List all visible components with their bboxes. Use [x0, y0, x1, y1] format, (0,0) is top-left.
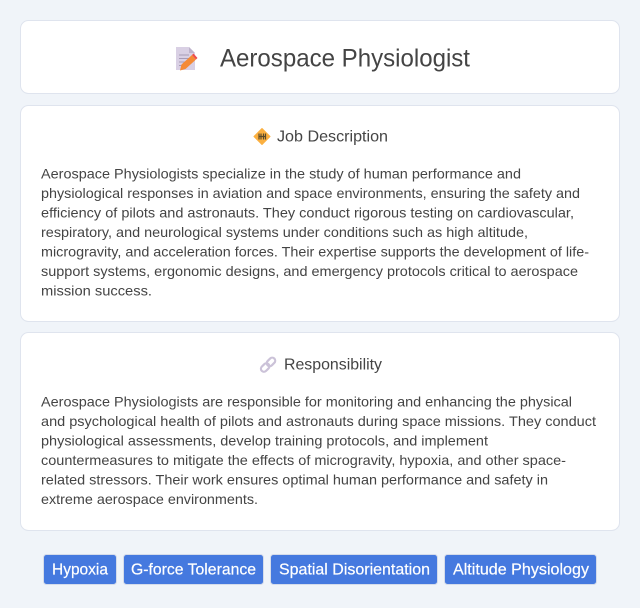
- text: responsibility paragraph: and psychological health of pilots and astronauts during space missions. They conduct: [41, 413, 596, 429]
- title: Aerospace Physiologist: [220, 44, 470, 72]
- text: job description paragraph: respiratory, and neurological systems under conditions such as high altitude,: [41, 224, 528, 240]
- panel: title card: [20, 20, 620, 94]
- text: job description paragraph: mission success.: [41, 282, 152, 298]
- tag: hypoxia: [44, 554, 116, 584]
- text: responsibility paragraph: [41, 394, 596, 507]
- text: responsibility paragraph: Aerospace Physiologists are responsible for monitoring and enhancing the physical: [41, 394, 572, 410]
- icon: chain link: [260, 356, 276, 373]
- icon: orange diamond sign: [254, 128, 270, 144]
- text: job description paragraph: support systems, ergonomic designs, and emergency protocols critical to aerospace: [41, 263, 578, 279]
- tag: g-force tolerance: G-force Tolerance: [131, 562, 256, 578]
- text: responsibility paragraph: extreme aerospace environments.: [41, 491, 258, 507]
- text: job description paragraph: physiological responses in aviation and space environments, ensuring the safety and: [41, 185, 580, 201]
- tag: spatial disorientation: [270, 554, 438, 584]
- tag: altitude physiology: [444, 554, 596, 584]
- heading: job description: Job Description: [277, 128, 388, 146]
- text: job description paragraph: Aerospace Physiologists specialize in the study of human performance and: [41, 166, 521, 182]
- tag: altitude physiology: Altitude Physiology: [453, 562, 589, 578]
- tag: spatial disorientation: Spatial Disorientation: [279, 562, 430, 578]
- heading: responsibility: Responsibility: [284, 356, 382, 374]
- panel: responsibility: [20, 332, 620, 530]
- text: job description paragraph: microgravity, and acceleration forces. Their expertise supports the development of life-: [41, 244, 589, 260]
- text: responsibility paragraph: countermeasures to mitigate the effects of microgravity, hypoxia, and other space-: [41, 452, 566, 468]
- panel: job description: [20, 106, 620, 322]
- tag: hypoxia: Hypoxia: [52, 562, 108, 578]
- tag: g-force tolerance: [124, 554, 264, 584]
- text: responsibility paragraph: physiological assessments, develop training protocols, and implement: [41, 432, 488, 448]
- text: job description paragraph: [41, 166, 589, 298]
- text: responsibility paragraph: related stressors. Their work ensures optimal human performance and safety in: [41, 472, 548, 488]
- icon: document with pencil: [176, 47, 198, 70]
- text: job description paragraph: efficiency of pilots and astronauts. They conduct rigorous testing on cardiovascular,: [41, 204, 574, 220]
- tags row: [44, 554, 596, 584]
